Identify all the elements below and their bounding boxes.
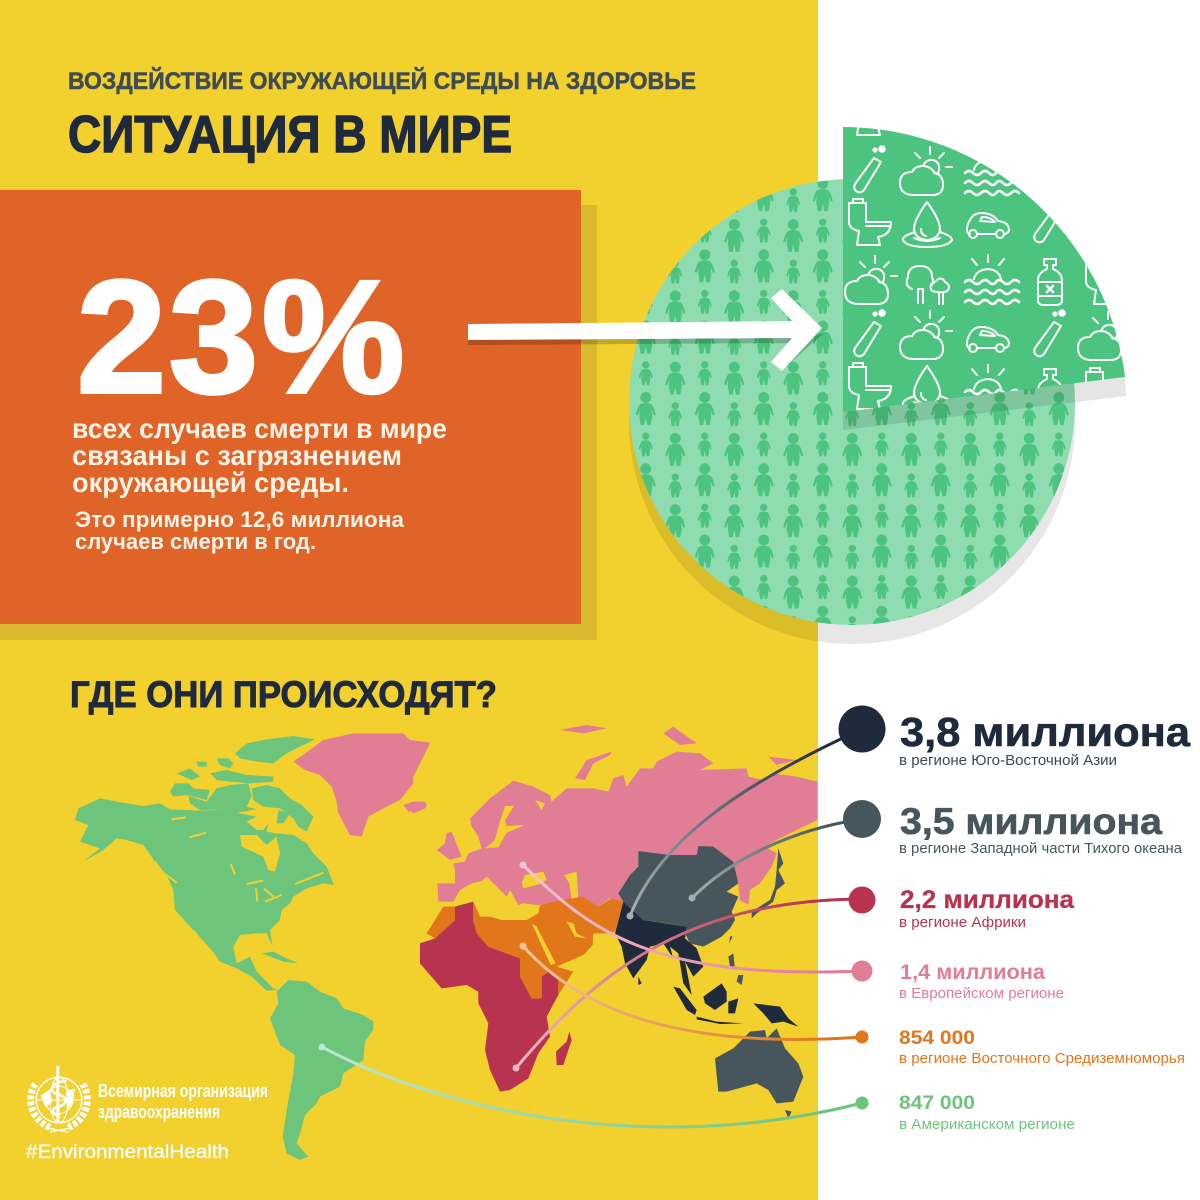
map: world regions west — [75, 733, 430, 1160]
connector line: Americas — [318, 1044, 862, 1127]
connector line: Western Pacific — [688, 819, 862, 902]
big number 23%: 23% — [77, 247, 404, 426]
map: North America — [75, 736, 334, 991]
map: South America — [270, 980, 373, 1160]
text block: main statement: связаны с загрязнением — [72, 440, 402, 471]
map: Hudson Bay — [240, 835, 280, 872]
pie chart: all deaths with people pattern — [629, 179, 1075, 625]
heading: subtitle: ВОЗДЕЙСТВИЕ ОКРУЖАЮЩЕЙ СРЕДЫ НА ЗДОРОВЬЕ — [68, 67, 696, 95]
text block: deaths per year: случаев смерти в год. — [75, 529, 316, 554]
text block: WHO name — [98, 1081, 268, 1122]
map: South-East Asia — [615, 902, 798, 1027]
legend: Americas — [856, 1093, 1075, 1133]
legend: Eastern Mediterranean: 854 000 — [899, 1028, 975, 1049]
legend: Western Pacific: 3,5 миллиона — [900, 801, 1162, 842]
panel: yellow background — [0, 0, 818, 1200]
legend: South-East Asia: в регионе Юго-Восточной Азии — [899, 753, 1117, 769]
map: North American lakes and gulfs — [155, 817, 323, 950]
map: inland seas — [485, 800, 578, 900]
map: Red Sea and Persian Gulf — [532, 922, 587, 965]
legend: Americas: в Американском регионе — [899, 1117, 1075, 1133]
legend: Western Pacific: в регионе Западной части Тихого океана — [899, 841, 1183, 857]
legend: Western Pacific — [843, 800, 1183, 857]
heading: title: СИТУАЦИЯ В МИРЕ — [68, 106, 512, 164]
arrow: from statistic to wedge — [468, 289, 822, 371]
text block: main statement — [72, 413, 447, 498]
legend: Americas: 847 000 — [899, 1093, 975, 1114]
text block: deaths per year: Это примерно 12,6 миллиона — [75, 507, 405, 532]
connector line: Africa — [512, 899, 862, 1072]
text block: main statement: всех случаев смерти в мире — [72, 413, 447, 444]
legend: Africa — [848, 886, 1075, 931]
connector line: Eastern Mediterranean — [520, 942, 862, 1039]
panel: orange box shadow — [0, 205, 597, 640]
text block: main statement: окружающей среды. — [72, 467, 349, 498]
legend: Europe — [852, 960, 1064, 1002]
connector line: South-East Asia — [626, 729, 862, 920]
map: Africa — [420, 902, 572, 1092]
map: Greenland and Iceland — [293, 733, 430, 837]
map: Europe and Russia — [410, 725, 817, 907]
legend: Eastern Mediterranean — [856, 1028, 1185, 1067]
icon: WHO emblem — [31, 1066, 87, 1132]
pie wedge: 23 percent with environment icons — [843, 127, 1125, 412]
heading: where do they occur: ГДЕ ОНИ ПРОИСХОДЯТ? — [70, 674, 497, 715]
panel: orange statistic box — [0, 190, 581, 624]
legend: Africa: в регионе Африки — [899, 915, 1026, 931]
legend: Europe: в Европейском регионе — [899, 986, 1064, 1002]
legend: Africa: 2,2 миллиона — [900, 886, 1075, 914]
text block: WHO name: Всемирная организация — [98, 1081, 268, 1101]
wedge shadow — [843, 377, 1126, 430]
map: world regions east — [410, 725, 817, 1118]
legend: Eastern Mediterranean: в регионе Восточного Средиземноморья — [899, 1051, 1185, 1067]
pie shadow — [629, 198, 1075, 644]
connector line: Europe — [520, 862, 862, 972]
map: Western Pacific — [618, 846, 803, 1118]
text block: deaths per year — [75, 507, 405, 554]
hashtag: #EnvironmentalHealth — [26, 1142, 229, 1163]
arrow shadow — [468, 333, 824, 370]
map: Eastern Mediterranean region — [427, 897, 623, 998]
legend: South-East Asia: 3,8 миллиона — [900, 709, 1191, 755]
text block: WHO name: здравоохранения — [98, 1102, 220, 1122]
legend: Europe: 1,4 миллиона — [900, 961, 1045, 984]
legend: South-East Asia — [838, 706, 1191, 769]
